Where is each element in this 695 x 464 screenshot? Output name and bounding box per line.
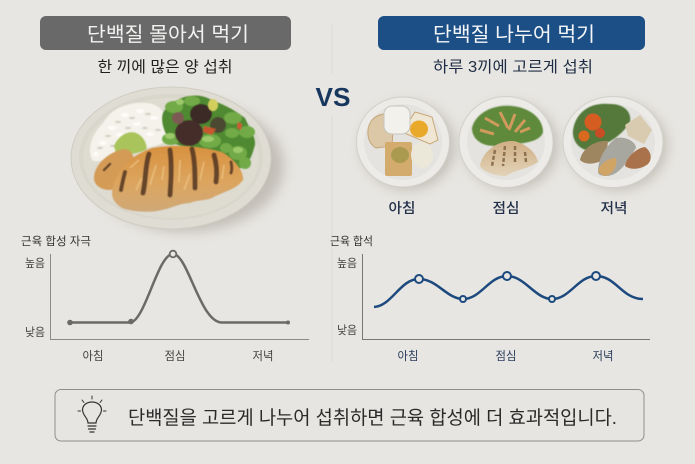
axes: [362, 254, 650, 340]
header: distributed protein: [378, 16, 645, 50]
illustration: large plate: [71, 87, 284, 232]
callout text: 단백질을 고르게 나누어 섭취하면 근육 합성에 더 효과적입니다.: [128, 407, 617, 429]
header: concentrated protein: [40, 16, 291, 50]
chicken: [94, 146, 243, 212]
line: [374, 276, 643, 307]
x axis labels: 아침: [398, 349, 418, 363]
x axis labels: 점심: [164, 349, 186, 363]
rice: [90, 103, 167, 161]
chart title: 근육 합석: [330, 235, 373, 248]
subtitle left: 한 끼에 많은 양 섭취: [98, 58, 232, 76]
axes: [50, 254, 309, 340]
y axis labels: [25, 257, 45, 339]
divider: [331, 25, 333, 362]
x axis labels: [398, 349, 614, 363]
y axis labels: 높음: [25, 257, 45, 270]
data points: [415, 272, 600, 302]
y axis labels: 낮음: [25, 326, 45, 339]
lettuce by rice: [114, 132, 147, 154]
plate: dinner: [563, 96, 667, 190]
chart: distributed intake: [330, 235, 650, 363]
salad: [162, 95, 255, 169]
VS label: VS: [316, 82, 350, 112]
y axis labels: [337, 257, 357, 337]
subtitle right: 하루 3끼에 고르게 섭취: [433, 58, 593, 76]
x axis labels: [82, 349, 274, 363]
x axis labels: 아침: [82, 349, 104, 363]
meal label: lunch: 점심: [492, 200, 520, 216]
data points: [67, 251, 290, 325]
y axis labels: 낮음: [337, 324, 357, 337]
y axis labels: 높음: [337, 257, 357, 270]
icon: light bulb: [78, 396, 106, 432]
x axis labels: 저녁: [592, 349, 614, 363]
meal label: dinner: 저녁: [600, 200, 628, 216]
chart title: 근육 합성 자극: [21, 235, 91, 248]
x axis labels: 점심: [496, 349, 516, 363]
header: concentrated protein: 단백질 몰아서 먹기: [87, 23, 249, 46]
meal label: breakfast: 아침: [388, 200, 416, 216]
plate: lunch: [459, 96, 558, 190]
line: [70, 254, 288, 322]
chart: concentrated intake: [21, 235, 309, 363]
x axis labels: 저녁: [252, 349, 274, 363]
plate: breakfast: [356, 97, 455, 190]
callout: [55, 390, 644, 441]
header: distributed protein: 단백질 나누어 먹기: [433, 23, 595, 46]
